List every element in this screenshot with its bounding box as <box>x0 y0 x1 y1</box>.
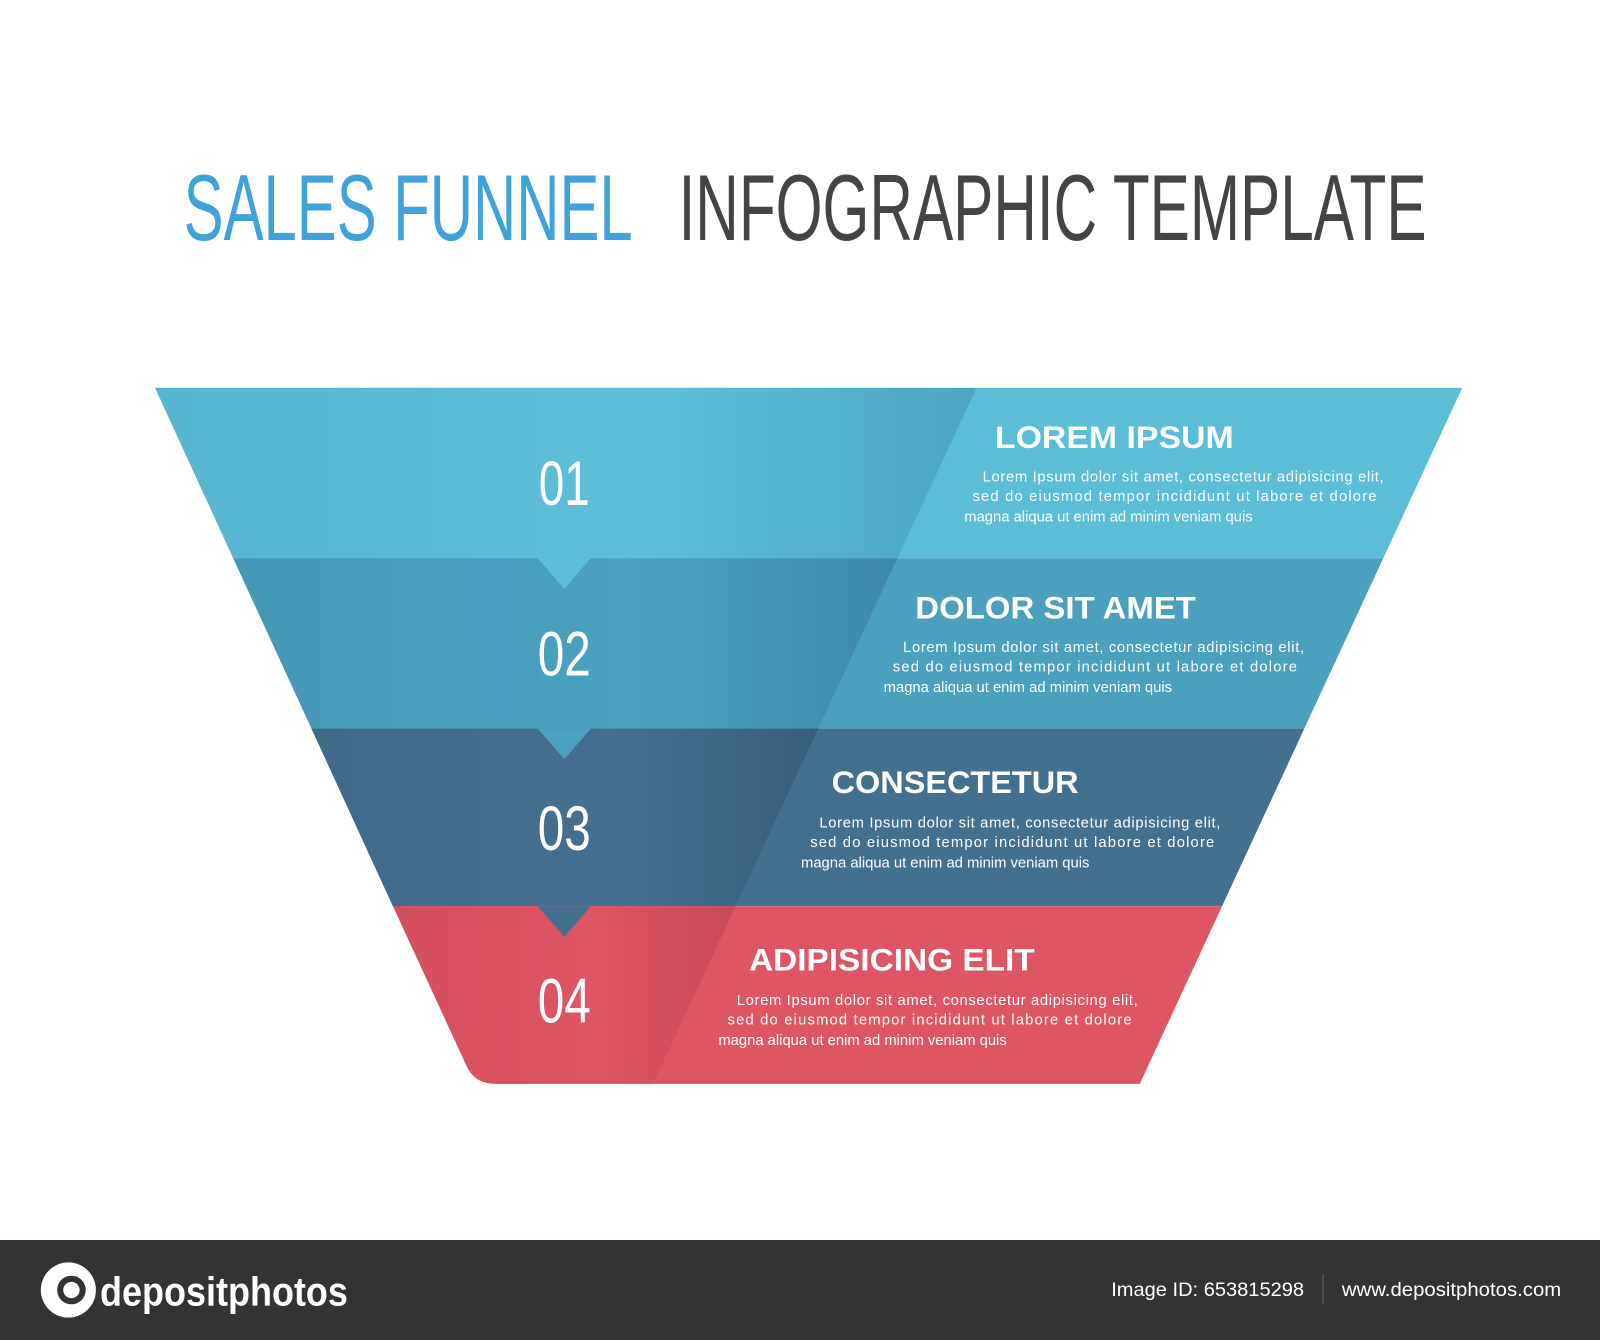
footer bar <box>0 1240 1600 1340</box>
band 1: LOREM IPSUM <box>995 419 1234 455</box>
funnel <box>155 388 1462 1084</box>
band 2: 02 <box>538 620 591 690</box>
band 1: sed do eiusmod tempor incididunt ut labore et dolore <box>972 489 1377 505</box>
band 2: Lorem Ipsum dolor sit amet, consectetur adipisicing elit, <box>903 640 1304 656</box>
band 3: sed do eiusmod tempor incididunt ut labore et dolore <box>810 835 1214 851</box>
band 3 <box>312 729 1304 906</box>
band 4: ADIPISICING ELIT <box>749 942 1035 978</box>
footer bar: depositphotos <box>100 1268 348 1314</box>
band 4 <box>393 906 1222 1084</box>
band 2: sed do eiusmod tempor incididunt ut labore et dolore <box>893 660 1297 676</box>
band 3: Lorem Ipsum dolor sit amet, consectetur adipisicing elit, <box>819 816 1220 832</box>
title: SALES FUNNEL <box>184 155 633 260</box>
band 4: Lorem Ipsum dolor sit amet, consectetur adipisicing elit, <box>737 993 1138 1009</box>
band 3: CONSECTETUR <box>832 764 1079 800</box>
band 2: DOLOR SIT AMET <box>915 589 1196 625</box>
band 2 <box>233 558 1383 729</box>
band 4: magna aliqua ut enim ad minim veniam quis <box>718 1033 1007 1049</box>
band 1 <box>155 388 1462 558</box>
title <box>184 155 1427 260</box>
band 3: magna aliqua ut enim ad minim veniam quis <box>801 855 1089 871</box>
footer bar: Image ID: 653815298 <box>1111 1279 1304 1301</box>
icon: camera logo <box>41 1262 96 1318</box>
band 1: Lorem Ipsum dolor sit amet, consectetur adipisicing elit, <box>983 470 1384 486</box>
band 3: 03 <box>538 794 591 864</box>
band 1: magna aliqua ut enim ad minim veniam quis <box>964 510 1253 526</box>
band 4: 04 <box>538 967 591 1037</box>
band 1: 01 <box>539 449 590 519</box>
band 2: magna aliqua ut enim ad minim veniam quis <box>884 680 1172 696</box>
footer bar: www.depositphotos.com <box>1341 1279 1561 1301</box>
band 4: sed do eiusmod tempor incididunt ut labore et dolore <box>728 1013 1132 1029</box>
